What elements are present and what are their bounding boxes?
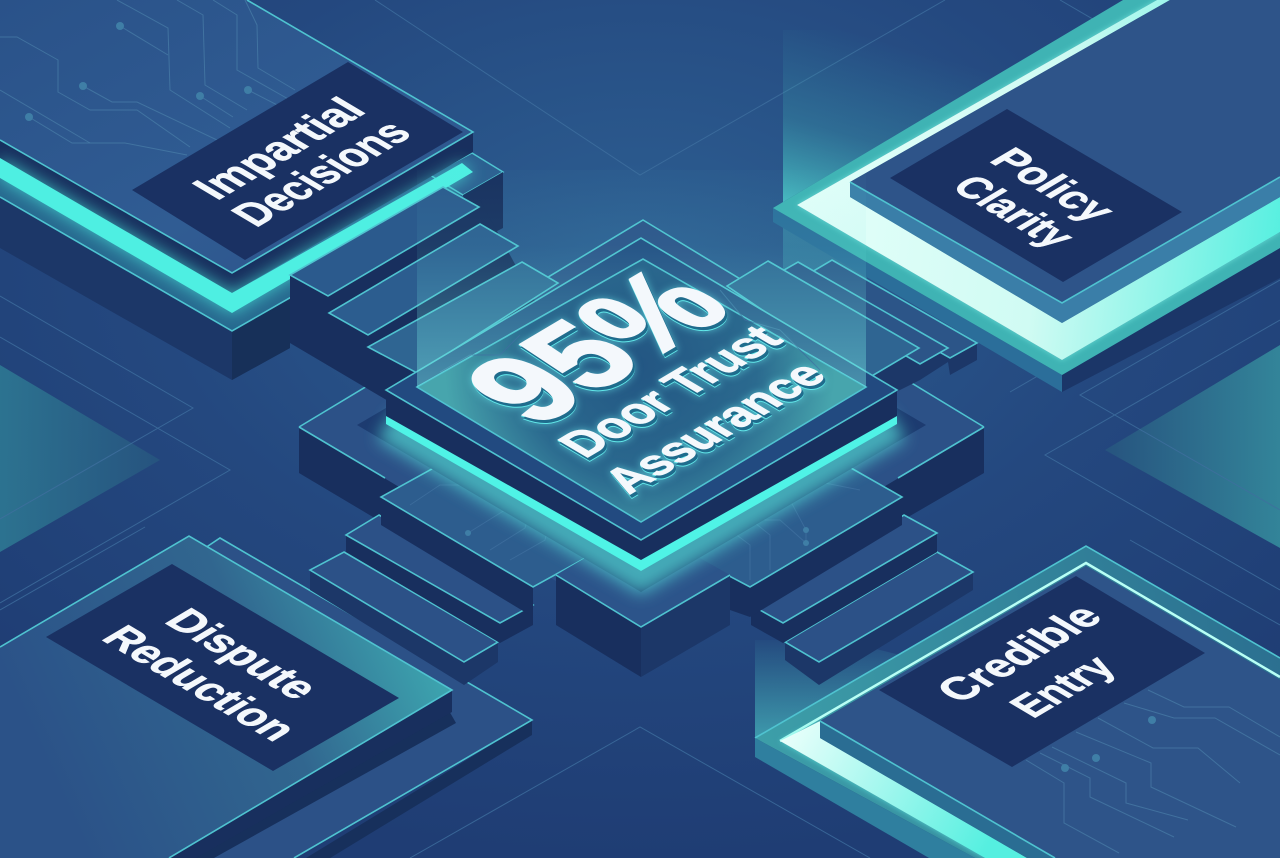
panel: Dispute Reduction bbox=[0, 536, 532, 858]
bright strip glow bbox=[797, 0, 1280, 360]
back step under panel bbox=[430, 153, 503, 195]
95%: 95% bbox=[434, 249, 760, 442]
chip side bbox=[386, 390, 897, 568]
recess shadow under chip bbox=[357, 408, 926, 592]
glass light column bbox=[417, 170, 866, 387]
inner slab side bbox=[850, 177, 1280, 323]
shadow under main slab bbox=[160, 695, 456, 858]
bright strip bbox=[797, 0, 1280, 360]
slab side bbox=[820, 721, 1055, 858]
label plate bbox=[890, 109, 1182, 282]
Credible: Credible bbox=[925, 597, 1113, 709]
lower base of panel bbox=[0, 172, 473, 380]
bright strip bbox=[780, 721, 1027, 858]
panel outline bbox=[0, 0, 473, 273]
slab outer side bbox=[773, 208, 1280, 392]
circuit traces bbox=[0, 0, 295, 155]
label plate bbox=[879, 576, 1205, 767]
outer side bbox=[755, 738, 975, 858]
centre headline text bbox=[434, 249, 838, 501]
centre chip stack bbox=[290, 170, 984, 685]
steps upper right bbox=[727, 260, 977, 400]
Door Trust: Door Trust bbox=[546, 318, 794, 465]
steps upper left bbox=[290, 187, 558, 405]
inner slab face bbox=[850, 0, 1280, 303]
panel: Policy Clarity bbox=[773, 0, 1280, 400]
traces on glass bbox=[440, 290, 820, 372]
label text bbox=[91, 602, 330, 748]
glass glow column bbox=[755, 640, 900, 738]
top face with circuit traces bbox=[0, 0, 473, 273]
Impartial: Impartial bbox=[181, 90, 376, 206]
back slab bbox=[0, 538, 532, 858]
Assurance: Assurance bbox=[592, 355, 838, 501]
chip top face bbox=[386, 238, 897, 540]
panel: Impartial Decisions bbox=[0, 0, 503, 380]
Clarity: Clarity bbox=[942, 169, 1086, 254]
panel: Credible Entry bbox=[755, 546, 1280, 858]
teal rim bbox=[773, 0, 1280, 375]
label plate bbox=[132, 62, 463, 260]
traces on step bbox=[730, 470, 860, 580]
dark side of panel bbox=[0, 132, 473, 293]
traces on step bbox=[410, 465, 585, 560]
Dispute: Dispute bbox=[154, 602, 330, 706]
slab face with traces bbox=[820, 566, 1280, 858]
centre bottom block bbox=[556, 525, 730, 677]
main slab face bbox=[0, 536, 452, 858]
label text bbox=[942, 142, 1126, 254]
lower platform bbox=[299, 220, 984, 632]
label plate bbox=[46, 564, 399, 771]
glass column below strip bbox=[783, 214, 867, 400]
cyan strip bbox=[386, 416, 897, 571]
label text bbox=[925, 597, 1126, 724]
cyan glow beneath chip bbox=[386, 425, 897, 575]
steps lower right bbox=[680, 460, 973, 685]
Policy: Policy bbox=[979, 142, 1126, 228]
Reduction: Reduction bbox=[91, 619, 308, 748]
teal rim bbox=[755, 546, 1280, 858]
Entry: Entry bbox=[999, 649, 1126, 724]
label text bbox=[181, 90, 422, 233]
bright inner line bbox=[780, 563, 1280, 741]
Decisions: Decisions bbox=[220, 113, 422, 233]
main slab side bbox=[169, 690, 452, 858]
teal glow above strip bbox=[773, 0, 1123, 208]
circuit traces bbox=[1026, 690, 1280, 853]
glass top face bbox=[417, 259, 866, 522]
cyan glow strip bbox=[0, 158, 473, 313]
steps lower left bbox=[310, 460, 600, 685]
